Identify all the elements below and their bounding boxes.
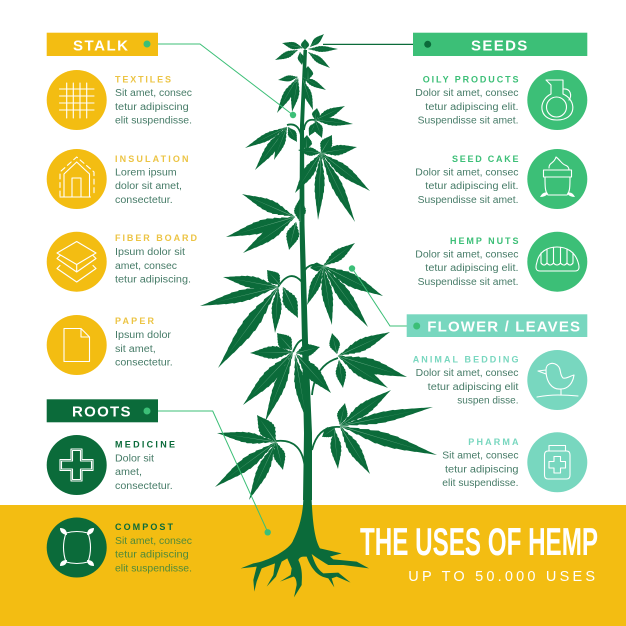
connector: stalk [147,44,296,118]
item: hemp nuts: tetur adipiscing elit. [425,263,518,274]
icon: medicine jar [527,432,587,492]
item: insulation: INSULATION [115,154,188,164]
item: medicine: Dolor sit [115,453,154,464]
connector: seeds [323,43,427,45]
item: medicine [47,435,175,495]
right leaf, bottom [319,385,439,477]
item: compost: tetur adipiscing [115,550,189,561]
item: insulation: Lorem ipsum [115,168,177,179]
roots [241,500,369,597]
banner: stalk: STALK [73,38,128,54]
item: pharma: Sit amet, consec [442,451,518,462]
item: textiles: elit suspendisse. [115,116,192,127]
banner: seeds: SEEDS [471,38,527,54]
item: pharma: tetur adipiscing [445,465,518,476]
item: hemp nuts: Suspendisse sit amet. [418,277,518,288]
item: animal bedding: Dolor sit amet, consec [416,368,518,379]
banner: flower and leaves [407,314,587,337]
item: animal bedding [413,350,587,410]
item: insulation [47,149,188,209]
item: animal bedding: suspen disse. [457,396,518,406]
hemp plant [199,32,439,597]
right leaf, lower middle [327,326,409,393]
item: oily products: Dolor sit amet, consec [415,88,518,99]
item: animal bedding: ANIMAL BEDDING [413,354,518,364]
item: hemp nuts [415,232,587,292]
item: textiles: tetur adipiscing [115,102,189,113]
item: pharma: elit suspendisse. [442,478,518,489]
item: oily products: tetur adipiscing elit. [425,102,518,113]
item: compost [47,518,192,578]
item: fiber board: amet, consec [115,261,177,272]
item: hemp nuts: HEMP NUTS [450,236,518,246]
banner: seeds [413,33,587,56]
icon: sack of seed flour [527,149,587,209]
icon: medical cross [47,435,107,495]
subtitle: UP TO 50.000 USES [408,569,595,585]
top leaves [273,32,338,138]
item: pharma [442,432,587,492]
item: paper: PAPER [115,316,154,326]
item: oily products: Suspendisse sit amet. [418,116,518,127]
left leaf, upper middle [224,188,302,258]
large fan leaf [290,132,374,224]
item: textiles [47,70,192,130]
banner: roots: ROOTS [72,404,130,421]
banner: roots [47,399,158,422]
item: hemp nuts: Dolor sit amet, consec [415,250,518,261]
item: paper: sit amet, [115,344,156,355]
stem [300,50,312,500]
item: paper [47,315,173,375]
item: oily products [415,70,587,130]
icon: oil jug [527,70,587,130]
connector: flower and leaves [349,265,416,326]
item: fiber board: Ipsum dolor sit [115,247,185,258]
side branches [276,120,340,470]
item: fiber board [47,232,198,292]
item: compost: Sit amet, consec [115,536,192,547]
item: seed cake [415,149,587,209]
item: textiles: TEXTILES [115,75,171,85]
icon: stacked boards [47,232,107,292]
item: animal bedding: tetur adipiscing elit [428,382,519,393]
item: compost: COMPOST [115,522,174,532]
item: seed cake: tetur adipiscing elit. [425,181,518,192]
connector: roots [147,411,271,536]
item: insulation: consectetur. [115,195,173,206]
icon: fabric grid [47,70,107,130]
item: medicine: consectetur. [115,481,173,492]
icon: compost sack [47,518,107,578]
item: pharma: PHARMA [468,437,519,447]
item: insulation: dolor sit amet, [115,181,182,192]
left leaf, bottom [211,410,289,503]
item: seed cake: Dolor sit amet, consec [415,168,518,179]
item: medicine: amet, [115,467,142,478]
item: seed cake: SEED CAKE [452,154,518,164]
upper side leaves [243,102,353,173]
item: fiber board: tetur adipiscing. [115,275,191,286]
icon: paper sheet [47,315,107,375]
right leaf, middle [302,238,386,331]
item: fiber board: FIBER BOARD [115,233,198,243]
item: paper: Ipsum dolor [115,330,172,341]
item: medicine: MEDICINE [115,439,175,449]
yellow ground band [0,505,626,626]
icon: insulated house [47,149,107,209]
item: compost: elit suspendisse. [115,563,192,574]
banner: flower and leaves: FLOWER / LEAVES [427,318,580,336]
item: textiles: Sit amet, consec [115,88,192,99]
icon: hemp nut [527,232,587,292]
item: paper: consectetur. [115,358,173,369]
left leaf, middle [199,266,305,373]
central lower leaf [238,328,336,424]
item: seed cake: Suspendisse sit amet. [418,195,518,206]
icon: bird [527,350,587,410]
item: oily products: OILY PRODUCTS [423,75,518,85]
banner: stalk [47,33,158,56]
